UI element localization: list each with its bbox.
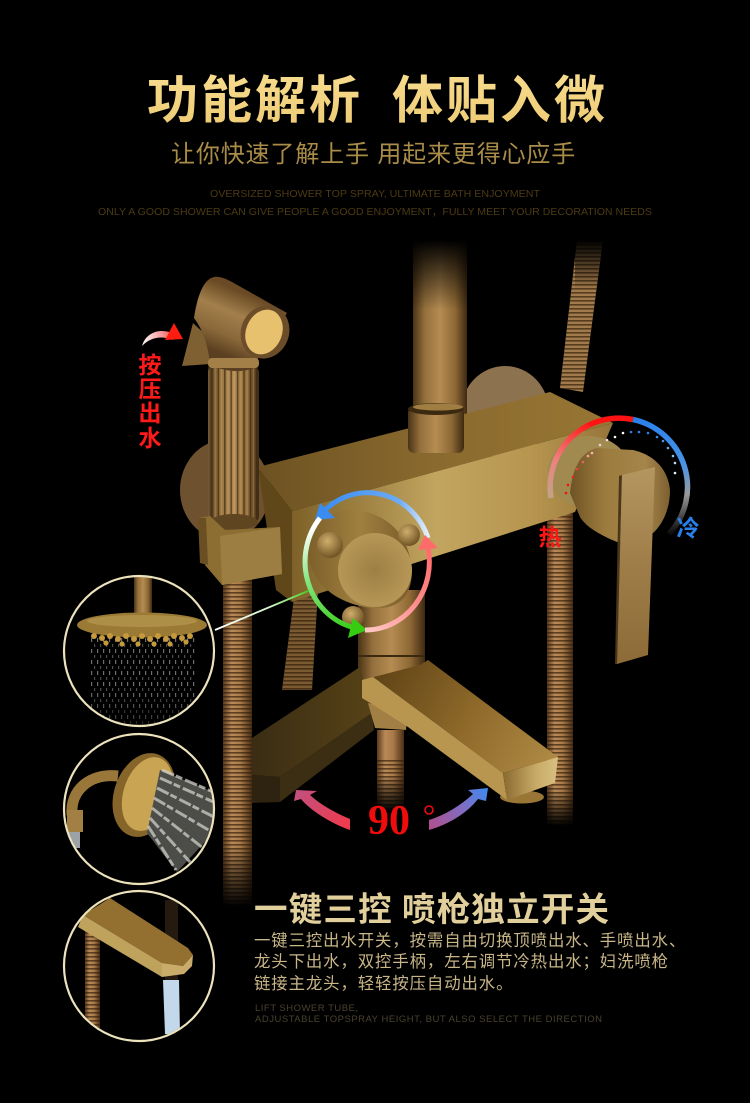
- side of valve body: [258, 467, 292, 602]
- english feature caption: ADJUSTABLE TOPSPRAY HEIGHT, BUT ALSO SELECT THE DIRECTION: [255, 1014, 602, 1025]
- pipe collar: [408, 403, 464, 453]
- top face of valve body: [258, 392, 613, 511]
- feature heading: 一键三控: [254, 892, 393, 929]
- detail circle: top spray: [64, 570, 214, 730]
- feature heading: 喷枪独立开关: [402, 892, 610, 929]
- feature description: 一键三控出水开关，按需自由切换顶喷出水、手喷出水、: [254, 932, 686, 950]
- english caption line 2: ONLY A GOOD SHOWER CAN GIVE PEOPLE A GOOD ENJOYMENT，FULLY MEET YOUR DECORATION NEEDS: [98, 206, 652, 218]
- front face of valve body: [292, 423, 613, 602]
- feature description: 链接主龙头，轻轻按压自动出水。: [254, 975, 513, 993]
- label: press for water: 按: [138, 352, 162, 378]
- ghost spout position: [252, 667, 374, 803]
- title: 功能解析: [147, 72, 363, 129]
- swivel spout: [362, 660, 558, 804]
- english caption line 1: OVERSIZED SHOWER TOP SPRAY, ULTIMATE BATH ENJOYMENT: [210, 188, 541, 200]
- label: press for water: [138, 352, 162, 451]
- infographic canvas: [62, 74, 699, 1042]
- english feature caption: [255, 1003, 602, 1025]
- lower valve pipe: [358, 590, 425, 682]
- feature description: 龙头下出水，双控手柄，左右调节冷热出水；妇洗喷枪: [254, 953, 669, 971]
- riser pipe: [413, 240, 605, 418]
- 90 degree swivel indicator: [294, 788, 488, 844]
- label: hot: 热: [538, 524, 562, 550]
- sprayer bracket: [198, 516, 282, 585]
- mixing valve knob: [308, 510, 420, 628]
- temperature dots: [565, 431, 676, 494]
- subtitle: 让你快速了解上手 用起来更得心应手: [171, 141, 576, 168]
- label: press for water: 水: [138, 425, 162, 451]
- rotation arrows around knob: [305, 493, 438, 638]
- hoses: [215, 240, 603, 907]
- 90 degree swivel indicator: 90: [368, 798, 410, 844]
- sprayer handle wand: [208, 367, 259, 530]
- press arrow: [142, 323, 183, 346]
- label: press for water: 出: [138, 400, 162, 426]
- lever handle: [548, 436, 670, 664]
- temperature arc: [550, 418, 688, 534]
- spout nut: [368, 703, 408, 730]
- english feature caption: LIFT SHOWER TUBE,: [255, 1003, 358, 1014]
- pointer line from knob to detail circle: [215, 591, 308, 630]
- detail circle: tub spout: [64, 891, 214, 1041]
- faucet assembly: [180, 240, 688, 907]
- feature heading: [254, 892, 610, 929]
- title second part: 体贴入微: [392, 72, 608, 129]
- label: press for water: 压: [138, 376, 162, 402]
- label: cold: 冷: [676, 515, 700, 541]
- detail circle: hand shower: [64, 734, 218, 884]
- feature description: [254, 932, 686, 993]
- wall mount discs: [180, 366, 549, 540]
- sprayer head: [182, 277, 297, 371]
